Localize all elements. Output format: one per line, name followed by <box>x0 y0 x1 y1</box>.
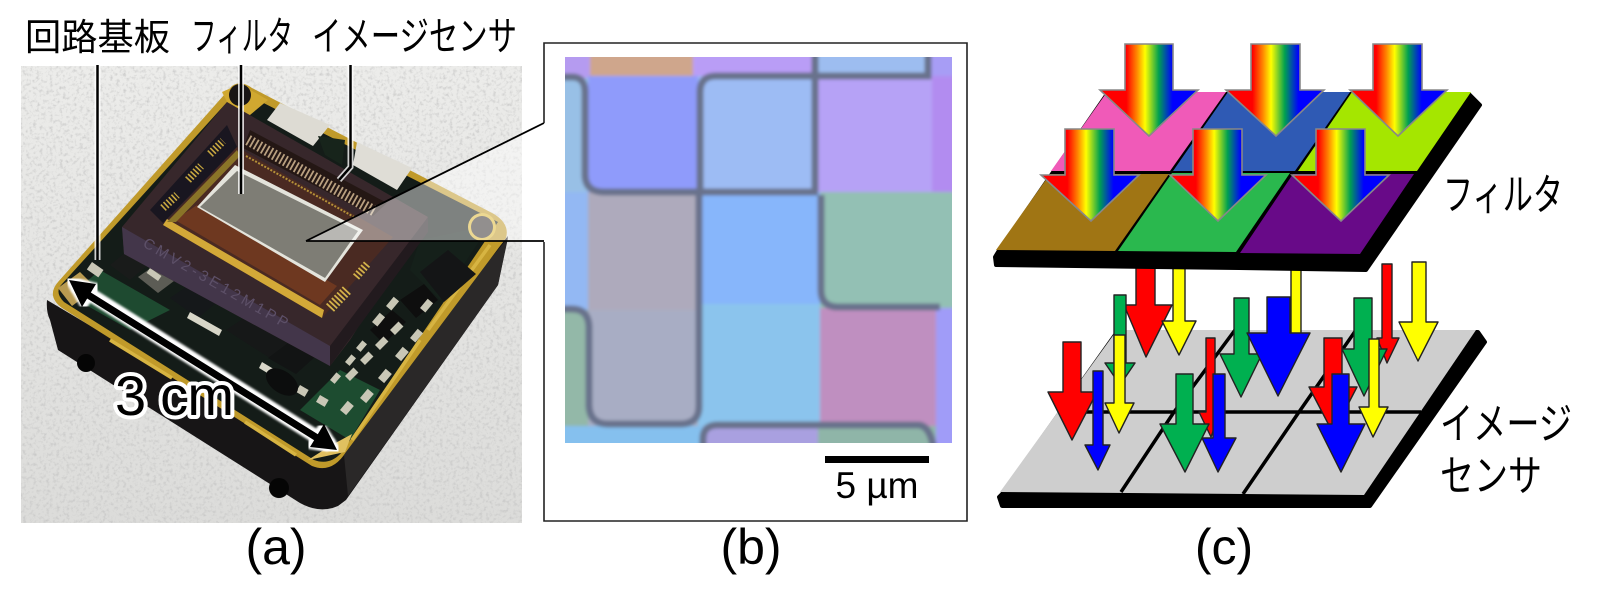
arrow: blue right <box>1317 374 1365 472</box>
sensor package: CMV2-3E12M1PP <box>140 235 294 333</box>
pcb components <box>87 239 476 415</box>
label: image sensor (panel c): センサ <box>1440 453 1542 501</box>
rainbow incident light arrows <box>1041 44 1447 221</box>
3 cm label: 3 cm <box>115 364 234 427</box>
arrow: red right <box>1309 338 1357 433</box>
arrow: yellow small <box>1105 335 1134 433</box>
arrow: yellow tall <box>1399 262 1438 361</box>
filter cell: purple <box>1240 174 1414 254</box>
device base <box>47 236 508 509</box>
arrow: red left <box>1048 342 1097 440</box>
filter cell: brown <box>996 174 1169 251</box>
arrow: red large rear <box>1124 250 1172 357</box>
rainbow arrow: lower right <box>1292 129 1389 221</box>
arrow: yellow rear <box>1162 250 1196 355</box>
scale bar <box>825 456 929 463</box>
sensor package <box>122 102 428 366</box>
panel b: filter micrograph <box>565 57 952 443</box>
panel labels <box>245 519 1253 575</box>
arrow: green small <box>1105 295 1135 385</box>
filter cell: blue <box>1173 92 1350 171</box>
rainbow arrow: top centre <box>1226 44 1324 136</box>
rainbow arrow: lower left <box>1041 129 1139 221</box>
label: circuit board: 回路基板 <box>25 17 170 58</box>
filter cell: lime <box>1298 92 1471 171</box>
arrow: yellow behind blue <box>1291 250 1301 340</box>
arrow: blue large <box>1247 297 1310 396</box>
rainbow arrow: lower centre <box>1170 129 1266 221</box>
label: image sensor (panel c) <box>1440 401 1572 501</box>
arrow: green upper centre <box>1220 298 1262 397</box>
device top plate <box>53 83 507 468</box>
label b: (b) <box>720 519 782 575</box>
label: filter: フィルタ <box>191 15 293 59</box>
arrow: blue small left <box>1085 371 1110 470</box>
arrow: green centre <box>1160 374 1209 472</box>
panel c: image sensor plate <box>999 330 1485 506</box>
label c: (c) <box>1195 519 1253 575</box>
label: image sensor: イメージセンサ <box>312 15 517 59</box>
arrow: green right <box>1342 298 1387 396</box>
white connectors <box>267 103 412 190</box>
scale label: 5 µm <box>836 465 918 506</box>
rainbow arrow: top right <box>1350 44 1447 136</box>
panel b frame <box>544 43 967 521</box>
arrow: yellow right <box>1359 339 1388 437</box>
label a: (a) <box>245 519 307 575</box>
arrow: red tall thin <box>1377 264 1399 363</box>
arrow: red thin centre <box>1199 338 1220 437</box>
filter cell: pink <box>1051 92 1226 171</box>
panel a: photograph of camera module <box>21 66 522 523</box>
rainbow arrow: top left <box>1100 44 1198 136</box>
3 cm dimension arrow <box>69 280 337 450</box>
callout wedge linking photo to micrograph <box>306 123 544 241</box>
arrow: blue centre <box>1202 374 1236 472</box>
filter cell: green <box>1118 173 1290 252</box>
leader lines from Japanese labels <box>98 65 350 260</box>
panel c: filter plate <box>995 92 1480 270</box>
colored light arrows <box>1048 250 1438 472</box>
